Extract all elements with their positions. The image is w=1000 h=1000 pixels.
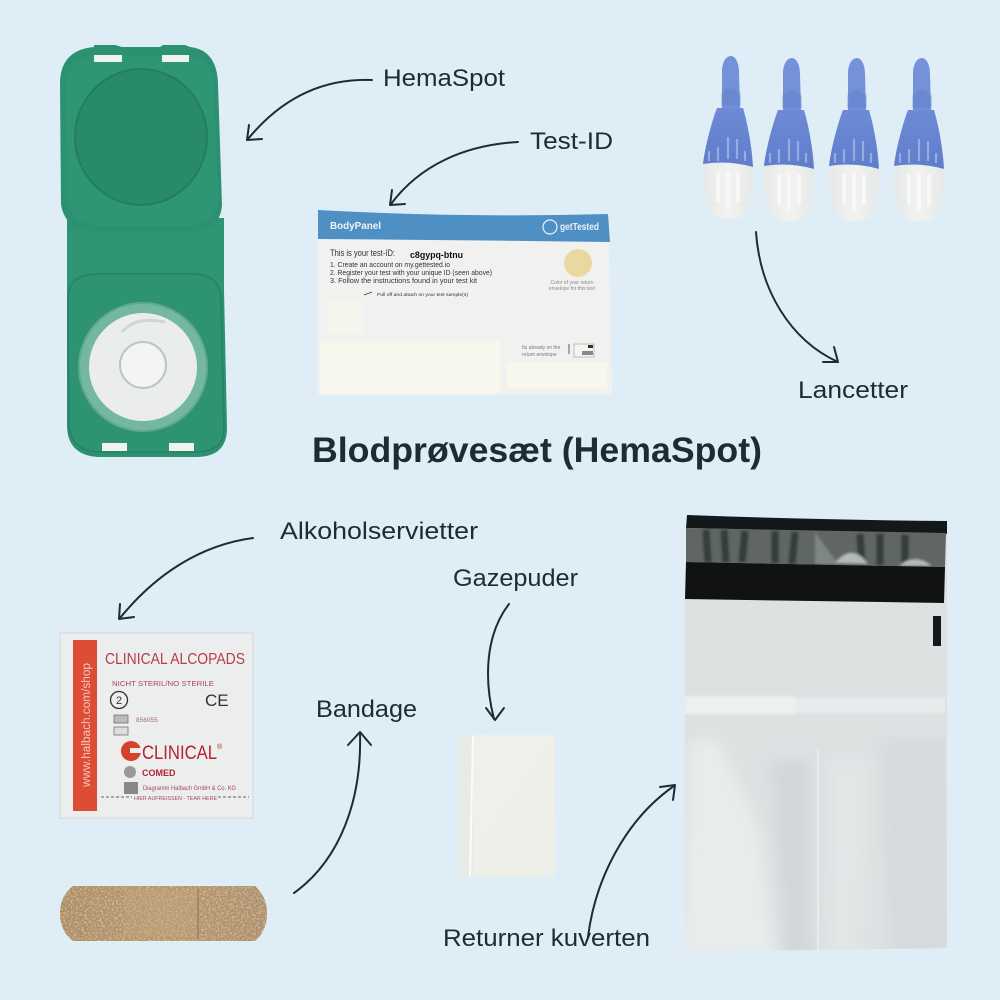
label: Test-ID: Test-ID xyxy=(530,128,613,155)
arrow: HemaSpot xyxy=(247,80,372,140)
arrow: Gazepuder xyxy=(486,604,509,720)
card: test ID sheet: BodyPanel xyxy=(330,220,381,232)
icon: gauze pad xyxy=(457,735,555,877)
arrow: Bandage xyxy=(294,732,371,893)
sub: black seal flap xyxy=(686,515,947,534)
sub: hinge tabs xyxy=(94,55,122,62)
arrow: Test-ID xyxy=(390,142,518,205)
sub: instructions: Pull off and attach on your test sample(s) xyxy=(377,292,468,298)
card: test ID sheet: return envelope xyxy=(522,352,557,358)
icon: alcohol pad sachet: ® xyxy=(217,743,223,751)
label: Alkoholservietter: Alkoholservietter xyxy=(280,518,478,545)
label: HemaSpot: HemaSpot xyxy=(383,65,505,92)
sub: envelope body folds xyxy=(933,616,941,646)
card: test ID sheet: getTested xyxy=(560,221,599,233)
icon: four lancets xyxy=(703,56,944,221)
icon: alcohol pad sachet: COMED xyxy=(142,768,176,778)
sub: blue header xyxy=(318,210,610,242)
icon: green HemaSpot case xyxy=(60,45,227,457)
arrow: Lancetter xyxy=(756,232,838,362)
label: Gazepuder: Gazepuder xyxy=(453,565,578,592)
icon: alcohol pad sachet: 856055 xyxy=(136,717,158,724)
sub: HemaSpot disc xyxy=(79,303,207,431)
icon: adhesive bandage xyxy=(60,886,267,941)
icon: alcohol pad sachet: HIER AUFREISSEN - TEAR HERE xyxy=(134,796,218,802)
card: test ID sheet xyxy=(318,210,612,395)
sub: instructions xyxy=(330,248,492,298)
icon: return envelope xyxy=(680,515,950,960)
label: Lancetter: Lancetter xyxy=(798,377,908,404)
sub: instructions: 1. Create an account on my.gettested.io xyxy=(330,260,450,269)
title: Blodprøvesæt (HemaSpot) xyxy=(312,431,762,470)
sub: instructions: 3. Follow the instructions found in your test kit xyxy=(330,276,477,285)
icon: alcohol pad sachet: www.halbach.com/shop xyxy=(81,663,93,788)
label: Returner kuverten: Returner kuverten xyxy=(443,925,650,952)
sub: instructions: c8gypq-btnu xyxy=(410,250,463,261)
sub: instructions: 2. Register your test with your unique ID (seen above) xyxy=(330,268,492,277)
sub: envelope colour swatch xyxy=(564,249,592,277)
sub: instructions: This is your test-ID: xyxy=(330,248,395,258)
sub: Clinical logo xyxy=(121,741,141,761)
card: test ID sheet: Its already on the xyxy=(522,345,561,351)
sub: stickers xyxy=(328,300,363,334)
card: test ID sheet: envelope for this test xyxy=(549,286,596,292)
icon: alcohol pad sachet: NICHT STERIL/NO STERILE xyxy=(112,679,214,688)
arrow: Alkoholservietter xyxy=(119,538,253,619)
arrow: Returner kuverten xyxy=(588,785,675,937)
icon: alcohol pad sachet: CE xyxy=(205,691,229,710)
icon: alcohol pad sachet: 2 xyxy=(116,695,122,707)
sub: red side bar xyxy=(73,640,97,811)
icon: alcohol pad sachet xyxy=(60,633,253,818)
label: Bandage: Bandage xyxy=(316,696,417,723)
card: test ID sheet: Color of your return xyxy=(550,280,594,286)
sub: lid recess xyxy=(75,69,207,205)
icon: alcohol pad sachet: CLINICAL xyxy=(142,742,217,764)
sub: product heading: CLINICAL ALCOPADS xyxy=(105,651,245,668)
icon: alcohol pad sachet: Diagramm Halbach GmbH & Co. KG xyxy=(143,786,236,792)
